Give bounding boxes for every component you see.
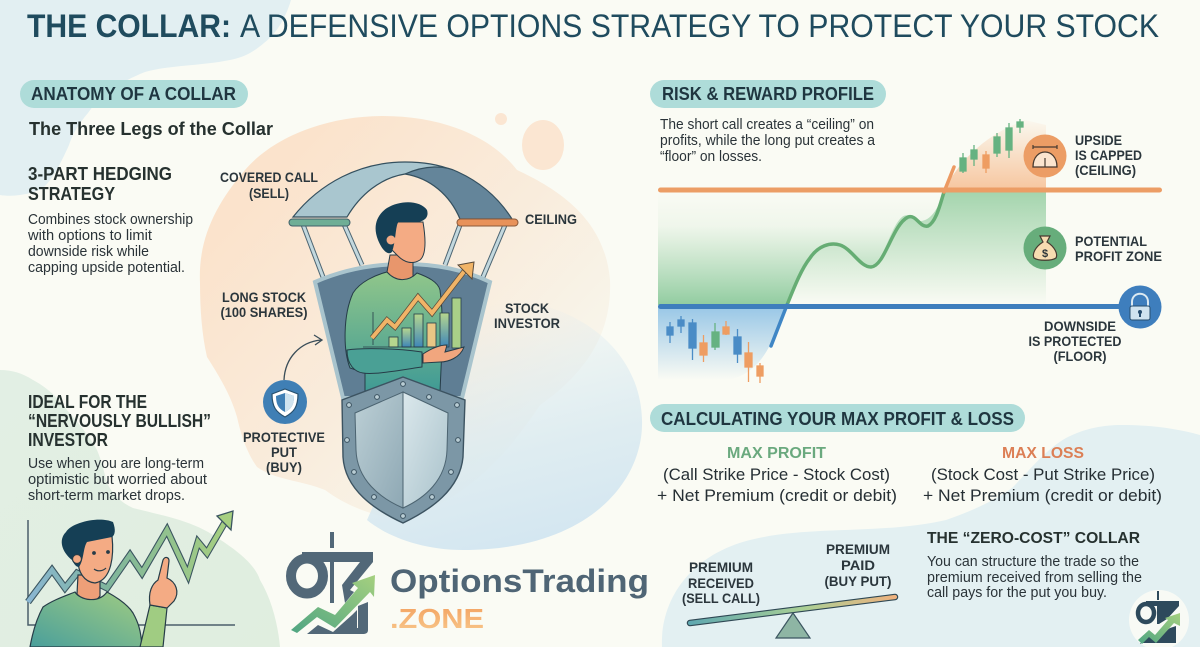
- low candles: [667, 316, 763, 383]
- hedging description: [27, 211, 193, 276]
- label: covered call: COVERED CALL: [220, 169, 318, 185]
- ideal description: optimistic but worried about: [28, 471, 208, 488]
- person: [345, 202, 442, 393]
- heading pill: anatomy: ANATOMY OF A COLLAR: [31, 84, 236, 104]
- icon: gauge ceiling: [1024, 134, 1066, 178]
- hedging description: Combines stock ownership: [28, 211, 193, 228]
- hedging description: capping upside potential.: [28, 259, 185, 276]
- person: [30, 520, 177, 647]
- label: protective put: PUT: [271, 444, 297, 460]
- seesaw: [690, 597, 895, 638]
- panel: max profit and loss: [650, 404, 1162, 638]
- hedging heading: 3-PART HEDGING: [28, 163, 172, 184]
- capped zone shading: [944, 120, 1046, 190]
- hedging description: with options to limit: [27, 227, 153, 244]
- struts: [302, 222, 505, 277]
- label: protective put: PROTECTIVE: [243, 429, 325, 445]
- label: premium paid: [824, 541, 892, 589]
- label: stock investor: INVESTOR: [494, 315, 560, 331]
- label: premium received: [682, 559, 760, 606]
- ideal heading: IDEAL FOR THE: [28, 391, 147, 412]
- heading pill: risk reward: [650, 80, 886, 108]
- label: premium paid: PREMIUM: [826, 541, 890, 557]
- label: premium paid: (BUY PUT): [824, 573, 892, 589]
- hedging heading: [28, 163, 172, 204]
- description: “floor” on losses.: [660, 148, 762, 165]
- label: premium paid: PAID: [841, 557, 875, 573]
- floor line: [658, 304, 1140, 309]
- label: covered call: (SELL): [249, 185, 289, 201]
- illustration: investor inside collar: [289, 162, 518, 523]
- max loss: (Stock Cost - Put Strike Price): [931, 465, 1155, 484]
- icon: money bag: $: [1042, 248, 1048, 260]
- front shield: [342, 377, 465, 523]
- growth arrow: [372, 262, 474, 338]
- ceiling line: [658, 188, 1162, 192]
- heading pill: calculating: CALCULATING YOUR MAX PROFIT & LOSS: [661, 409, 1014, 429]
- profit zone shading: [658, 192, 1046, 305]
- label: long stock: [220, 289, 308, 320]
- ideal heading: “NERVOUSLY BULLISH”: [28, 410, 211, 431]
- label: stock investor: [494, 300, 560, 331]
- heading pill: calculating: [650, 404, 1025, 432]
- label: upside capped: IS CAPPED: [1075, 147, 1142, 163]
- heading pill: anatomy: [20, 80, 248, 108]
- chart axes: [28, 520, 235, 625]
- price curve below floor: [771, 305, 787, 346]
- chart: payoff: [658, 119, 1162, 383]
- label: downside protected: IS PROTECTED: [1028, 333, 1122, 349]
- logo mark: [291, 532, 375, 634]
- arm and hand: [347, 345, 464, 373]
- label: premium received: RECEIVED: [688, 575, 754, 591]
- label: covered call: [220, 169, 318, 201]
- zero-cost description: You can structure the trade so the: [927, 553, 1139, 570]
- zero-cost description: call pays for the put you buy.: [927, 584, 1107, 601]
- label: ceiling: CEILING: [525, 211, 577, 227]
- hedging heading: STRATEGY: [28, 183, 116, 204]
- label: profit zone: POTENTIAL: [1075, 233, 1147, 249]
- max profit: + Net Premium (credit or debit): [657, 486, 897, 505]
- heading pill: risk reward: RISK & REWARD PROFILE: [662, 84, 874, 104]
- label: upside capped: [1075, 132, 1142, 178]
- icon: money bag: [1024, 226, 1066, 270]
- label: profit zone: [1075, 233, 1162, 264]
- high candles: [960, 119, 1023, 173]
- face: [93, 551, 109, 571]
- illustration: nervously bullish investor: [28, 511, 235, 647]
- hedging description: downside risk while: [28, 243, 149, 260]
- zero-cost description: premium received from selling the: [927, 569, 1142, 586]
- panel: anatomy of a collar: [20, 80, 273, 504]
- zero-cost heading: THE “ZERO-COST” COLLAR: [927, 530, 1140, 547]
- max loss: MAX LOSS: [1002, 445, 1084, 462]
- label: long stock: (100 SHARES): [220, 304, 308, 320]
- label: downside protected: (FLOOR): [1054, 348, 1106, 364]
- logo wordmark: OptionsTrading: [390, 563, 649, 599]
- title: A DEFENSIVE OPTIONS STRATEGY TO PROTECT YOUR STOCK: [240, 8, 1159, 44]
- arrow: put to stock: [284, 335, 322, 380]
- max loss: [923, 445, 1162, 505]
- label: long stock: LONG STOCK: [222, 289, 306, 305]
- label: protective put: [243, 429, 325, 475]
- icon: padlock: [1118, 286, 1162, 328]
- floor zone shading: [658, 306, 787, 380]
- max profit: MAX PROFIT: [727, 445, 826, 462]
- label: downside protected: DOWNSIDE: [1044, 318, 1116, 334]
- description: [660, 116, 876, 165]
- logo zone: .ZONE: [390, 603, 484, 634]
- label: premium received: (SELL CALL): [682, 590, 760, 606]
- canopy: [293, 162, 512, 219]
- ceiling bars: [289, 219, 518, 226]
- label: protective put: (BUY): [266, 459, 302, 475]
- price curve: [787, 192, 944, 305]
- label: profit zone: PROFIT ZONE: [1075, 248, 1162, 264]
- max loss: + Net Premium (credit or debit): [923, 486, 1162, 505]
- price curve above ceiling: [944, 167, 954, 192]
- max profit: [657, 445, 897, 505]
- label: stock investor: STOCK: [505, 300, 549, 316]
- subheading: The Three Legs of the Collar: [29, 118, 273, 139]
- ideal description: Use when you are long-term: [28, 455, 204, 472]
- max profit: (Call Strike Price - Stock Cost): [663, 465, 890, 484]
- label: downside protected: [1028, 318, 1122, 364]
- logo: OptionsTrading.Zone: [291, 532, 649, 634]
- zigzag arrow: [28, 511, 233, 602]
- shield back: [315, 264, 490, 398]
- ideal heading: [28, 391, 211, 450]
- zero-cost description: [927, 553, 1142, 601]
- label: upside capped: (CEILING): [1075, 162, 1136, 178]
- label: premium received: PREMIUM: [689, 559, 753, 575]
- ideal heading: INVESTOR: [28, 429, 108, 450]
- title: THE COLLAR:: [27, 8, 231, 44]
- icon: protective put shield: [263, 380, 307, 424]
- ideal description: [28, 455, 208, 504]
- mini bar chart: [363, 298, 461, 348]
- ideal description: short-term market drops.: [28, 487, 185, 504]
- description: profits, while the long put creates a: [660, 132, 876, 149]
- corner logo badge: [1129, 590, 1189, 647]
- description: The short call creates a “ceiling” on: [660, 116, 874, 133]
- panel: risk and reward: [650, 80, 1162, 383]
- label: upside capped: UPSIDE: [1075, 132, 1122, 148]
